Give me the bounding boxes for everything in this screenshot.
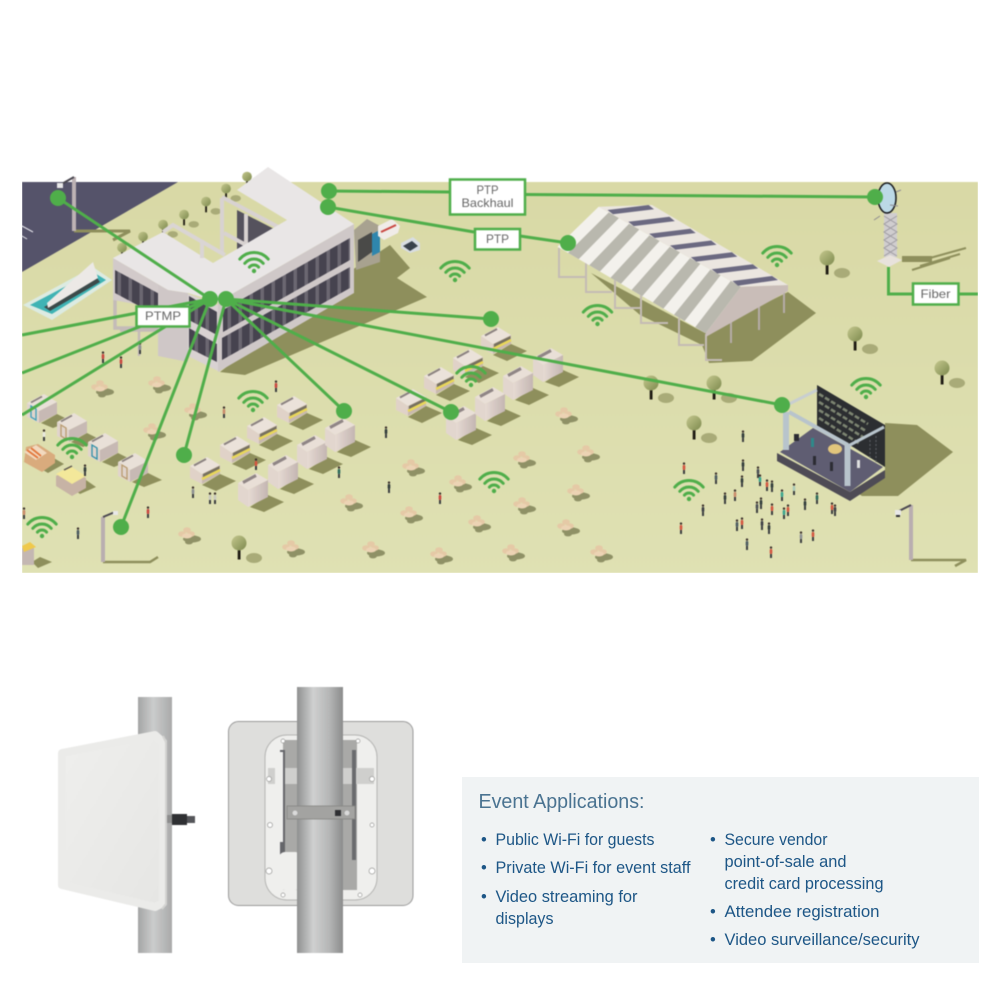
event site illustration <box>22 167 978 573</box>
label: PTP <box>475 229 520 250</box>
bullets: left column: displays <box>496 910 554 928</box>
bullets: right column: • <box>710 831 716 849</box>
bullets: left column <box>481 831 691 928</box>
roof <box>113 167 354 302</box>
gable wall <box>706 285 788 337</box>
bullets: right column: • <box>710 903 716 921</box>
main wall and windows <box>218 224 354 372</box>
corner kiosk <box>22 542 52 568</box>
label: Fiber <box>913 284 958 304</box>
bullets: left column: Private Wi-Fi for event staff <box>496 859 691 877</box>
concert stage <box>777 385 885 501</box>
bullets: right column: • <box>710 931 716 949</box>
bullets: right column: Attendee registration <box>724 903 880 921</box>
bottom-right street lamp <box>895 505 966 566</box>
label: PTMP <box>136 306 190 326</box>
far slope <box>599 205 788 287</box>
top-left street lamp <box>57 177 130 240</box>
wifi icons <box>28 246 880 538</box>
label: PTP Backhaul: Backhaul <box>462 196 514 210</box>
vendor stalls left cluster <box>22 394 162 568</box>
bullets: right column <box>710 831 920 949</box>
tent shadow <box>591 273 816 363</box>
label: PTMP: PTMP <box>145 309 181 323</box>
fountain <box>23 262 112 320</box>
antenna rear view <box>228 687 413 953</box>
people across the field <box>23 342 441 539</box>
office building <box>113 167 354 372</box>
near slope stripes <box>568 212 741 333</box>
panel background <box>462 777 979 963</box>
front rail <box>163 225 225 258</box>
left wing wall and windows <box>112 258 161 306</box>
picnic tables <box>91 376 613 564</box>
bullets: left column: Public Wi-Fi for guests <box>496 831 654 849</box>
back wing courtyard frame <box>222 197 282 252</box>
mounting bracket <box>265 735 377 900</box>
road and parking lot <box>22 182 178 272</box>
ground <box>22 182 978 573</box>
orange stall <box>24 444 64 473</box>
left wing lower frame <box>115 295 160 356</box>
yellow stall <box>56 466 96 496</box>
label: Fiber: Fiber <box>920 287 950 301</box>
bullets: left column: Video streaming for <box>496 888 638 906</box>
near slope <box>558 207 741 333</box>
vendor stalls centre cluster <box>190 396 371 512</box>
label: PTP Backhaul: PTP <box>476 183 498 197</box>
bullets: right column: Video surveillance/security <box>724 931 920 949</box>
panel <box>62 735 163 907</box>
heading: Event Applications: <box>478 791 644 813</box>
mast <box>297 687 343 953</box>
far slope stripes <box>608 205 778 286</box>
bullets: right column: Secure vendor <box>724 831 828 849</box>
bullets: left column: • <box>481 888 487 906</box>
bracket arms <box>268 740 374 890</box>
entrance annex and vehicles <box>354 219 420 270</box>
small trees behind building <box>116 171 252 254</box>
building shadow <box>220 245 427 375</box>
stub wall <box>188 294 218 371</box>
stage base <box>777 453 885 501</box>
label: PTP: PTP <box>486 232 509 246</box>
bolts <box>266 739 375 897</box>
network nodes <box>50 183 883 535</box>
network links <box>22 191 978 527</box>
stage truss <box>786 390 884 486</box>
drums and performers <box>794 434 860 471</box>
mast <box>138 697 172 953</box>
bullets: right column: point-of-sale and <box>724 853 846 871</box>
bullets: right column: credit card processing <box>724 875 884 893</box>
trees <box>232 250 965 563</box>
back plate <box>228 722 413 906</box>
crowd at stage <box>680 430 836 558</box>
vendor stalls right cluster <box>396 327 579 445</box>
antenna tower <box>874 183 966 270</box>
panel: event applications <box>462 777 979 963</box>
back screen <box>817 385 885 467</box>
corner column <box>158 285 188 362</box>
tent <box>558 205 788 360</box>
bullets: left column: • <box>481 859 487 877</box>
stage shadow <box>853 423 953 496</box>
tent posts <box>559 248 784 360</box>
antenna front view <box>62 697 195 953</box>
stage floor <box>780 428 883 492</box>
label: PTP Backhaul <box>450 180 525 214</box>
bullets: left column: • <box>481 831 487 849</box>
clamp strap <box>287 806 355 819</box>
panel edge <box>162 736 166 909</box>
bottom-left street lamp <box>101 511 158 562</box>
connector <box>167 814 195 825</box>
